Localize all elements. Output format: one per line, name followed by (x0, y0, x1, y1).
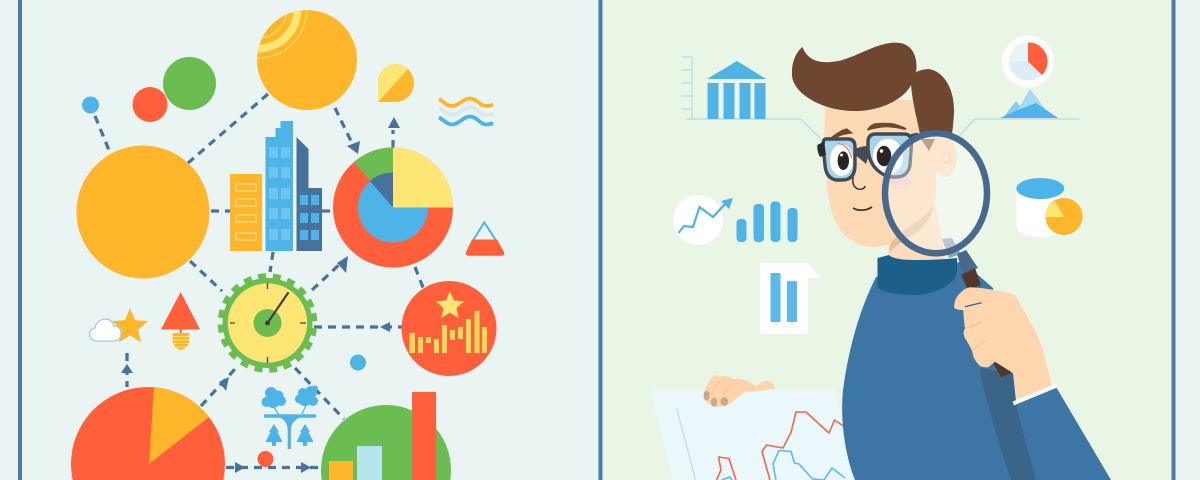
icon: waves (439, 98, 493, 124)
arrowheads (121, 117, 400, 473)
chart: city buildings (230, 121, 322, 251)
icon: orange star (112, 308, 148, 342)
illustration: eyebrows (827, 123, 907, 142)
illustration: magnifier connector (942, 238, 961, 258)
chart: donut pie (333, 148, 453, 268)
icon: cloud (90, 319, 121, 341)
panel frame: right border (1172, 0, 1176, 480)
icon: lightbulb triangle (161, 292, 200, 350)
illustration: back hair (911, 69, 954, 134)
icon: red circle (132, 87, 168, 122)
icon: flask triangle (466, 222, 504, 256)
icon: small blue dot (350, 354, 366, 370)
panel frame: left border (18, 0, 22, 480)
panel: right background (600, 0, 1174, 480)
illustration: hand holding paper (703, 375, 775, 407)
illustration: neck (888, 205, 946, 262)
illustration: magnifier handle shadow (980, 368, 1036, 480)
icon: top orange circle with rings (257, 10, 357, 110)
panel frame: centre border (598, 0, 602, 480)
illustration: sweater collar (878, 255, 957, 295)
icon: blue dot (82, 96, 99, 114)
icon: trees (262, 386, 318, 449)
illustration: nose (853, 177, 865, 189)
callout lines (682, 57, 1080, 141)
icon: green circle (163, 57, 216, 110)
icon: teardrop (378, 64, 414, 102)
dashed connectors (95, 94, 424, 468)
icon: small red dot (258, 451, 274, 467)
icon: growth chart (673, 195, 733, 245)
illustration: magnifier grip top (961, 268, 981, 290)
chart: green circle with bars (321, 392, 451, 480)
chart: red circle with star and bars (402, 281, 496, 376)
illustration: glasses and eyes (817, 134, 918, 180)
illustration: mouth (853, 207, 872, 210)
illustration: magnifier handle (957, 250, 978, 274)
icon: gear gauge (212, 267, 323, 379)
icon: bank (707, 61, 766, 119)
icon: big orange circle (76, 146, 210, 278)
illustration: front hair (792, 43, 916, 111)
illustration: magnifier grip bottom (990, 355, 1013, 378)
illustration: shirt cuff (1013, 386, 1057, 404)
illustration: paper chart (650, 390, 856, 480)
chart: rounded bars (736, 202, 798, 242)
illustration: magnifier lens (885, 133, 987, 253)
chart: red pie with orange slice (71, 387, 225, 480)
illustration: sideburn (921, 139, 935, 151)
icon: database with pie (1016, 178, 1083, 237)
icon: document with bars (760, 263, 821, 334)
icon: pie badge (1002, 36, 1054, 88)
illustration: sweater body (842, 262, 1111, 480)
illustration: hand on magnifier (954, 287, 1052, 400)
icon: mountains (1000, 89, 1058, 118)
illustration: face and ear (824, 100, 957, 253)
